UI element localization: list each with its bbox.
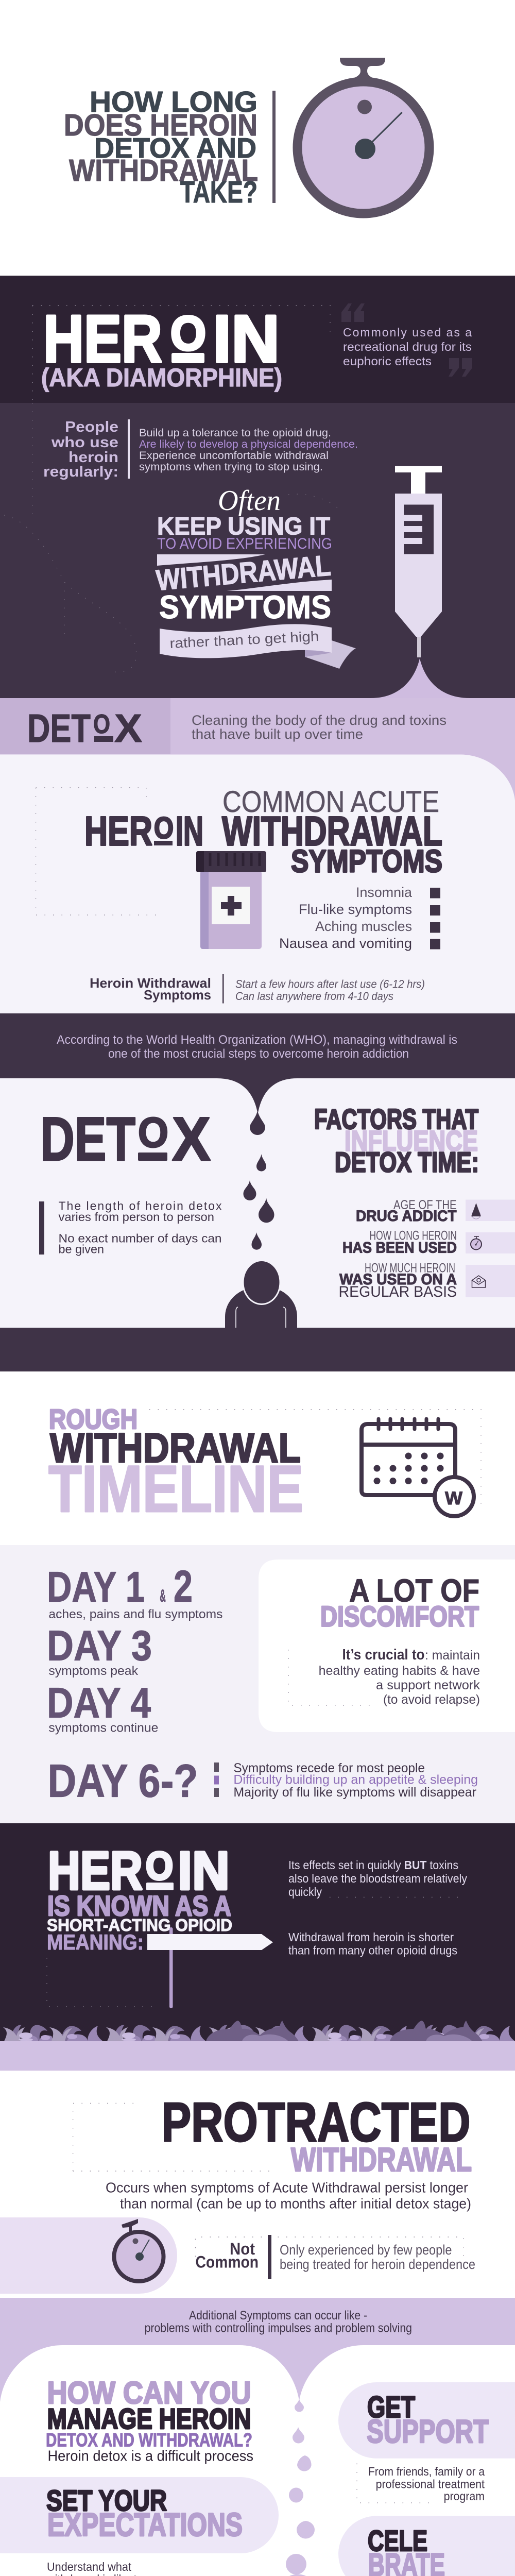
text: detox length varies: No exact number of days can <box>59 1231 221 1245</box>
icon: envelope with money <box>472 1276 485 1287</box>
factor: age of the drug addict: DRUG ADDICT <box>356 1208 456 1225</box>
text: it's crucial to: : maintain <box>425 1648 480 1663</box>
day 4: DAY 4 <box>47 1679 151 1727</box>
panel: short-acting opioid <box>0 1823 515 2041</box>
text: detox meaning <box>192 713 447 742</box>
text: only experienced by few <box>280 2242 475 2272</box>
panel: people who use heroin regularly <box>0 403 515 698</box>
text: detox length varies: be given <box>59 1243 104 1256</box>
text: effects and toxins <box>288 1858 467 1899</box>
heading: withdrawal: WITHDRAWAL <box>291 2141 472 2178</box>
pill: set your expectations <box>0 2477 279 2553</box>
label: heroin withdrawal symptoms <box>90 975 211 1003</box>
text: it's crucial to: (to avoid relapse) <box>383 1692 480 1707</box>
illustration: grass <box>0 2021 515 2041</box>
text: shorter withdrawal: than from many other opioid drugs <box>288 1943 457 1957</box>
heading: how can you manage heroin detox and withdrawal <box>46 2376 252 2450</box>
list: symptoms: Flu-like symptoms <box>299 902 412 917</box>
factor: age of the drug addict: AGE OF THE <box>393 1198 456 1212</box>
heading: meaning: MEANING: <box>47 1930 144 1954</box>
icon: syringe <box>371 466 470 698</box>
icon: pill bottle <box>196 851 266 949</box>
heading: detox <box>27 706 142 751</box>
factor: age of the drug addict <box>356 1198 515 1225</box>
text: from friends family <box>368 2465 485 2503</box>
list: symptoms: Aching muscles <box>315 919 412 934</box>
subheading: aka diamorphine: (AKA DIAMORPHINE) <box>41 363 282 392</box>
text: detox length varies: The length of heroin detox <box>59 1199 222 1213</box>
heading: symptoms: SYMPTOMS <box>291 844 442 879</box>
heading: heroin: O <box>170 306 206 360</box>
panel: timeline days <box>0 1545 515 1823</box>
day 3: symptoms peak <box>48 1664 139 1678</box>
icon: small stopwatch <box>471 1236 482 1250</box>
text: who statement: According to the World Health Organization (WHO), managing withdrawal is <box>57 1033 457 1047</box>
heading: factors that influence detox time: INFLUENCE <box>345 1124 478 1157</box>
heading: people who use heroin regularly: who use <box>51 434 118 451</box>
heading: detox: DET <box>27 706 91 751</box>
list: symptoms <box>279 885 440 951</box>
text: commonly used: recreational drug for its <box>343 340 472 353</box>
text: who statement <box>57 1033 457 1061</box>
heading: heroin: HER <box>43 301 162 376</box>
label: not common <box>196 2240 259 2272</box>
factor: how much heroin was used <box>339 1261 515 1300</box>
pill: stopwatch holder <box>0 2217 177 2294</box>
text: commonly used: Commonly used as a <box>343 326 472 339</box>
icon: party hat <box>471 1203 481 1219</box>
title: how long does heroin detox and withdrawal take <box>64 86 258 209</box>
heading: how can you manage heroin detox and withdrawal: DETOX AND WITHDRAWAL? <box>46 2430 252 2450</box>
factor: how long heroin has been used <box>342 1229 515 1257</box>
day 1 and 2: aches, pains and flu symptoms <box>48 1607 222 1621</box>
day 6 onward: Difficulty building up an appetite & sleeping <box>233 1772 478 1787</box>
heading: detox: O <box>93 709 110 739</box>
text: often: Often <box>218 485 281 517</box>
day 4: symptoms continue <box>48 1721 158 1735</box>
text: effects of regular use: Are likely to develop a physical dependence. <box>139 438 358 450</box>
heading: factors that influence detox time: DETOX TIME: <box>335 1146 479 1178</box>
text: effects of regular use: symptoms when trying to stop using. <box>139 461 323 473</box>
text: understand what withdrawal is like: Understand what <box>47 2560 132 2573</box>
illustration: lilac drops <box>289 2399 315 2539</box>
heading: people who use heroin regularly: heroin <box>68 449 118 466</box>
heading: heroin withdrawal: WITHDRAWAL <box>222 808 442 854</box>
title: how long does heroin detox and withdrawal take: HOW LONG <box>90 86 258 118</box>
day 6 onward: DAY 6-? <box>47 1756 198 1807</box>
heading: detox: O <box>138 1109 168 1156</box>
icon: opening quote <box>341 303 365 322</box>
text: it's crucial to: healthy eating habits & have <box>319 1664 480 1678</box>
heading: heroin: IN <box>213 301 280 376</box>
text: from friends family: professional treatment <box>376 2477 485 2490</box>
heading: heroin: O <box>146 1844 173 1888</box>
day 1 and 2 <box>47 1562 222 1621</box>
text: only experienced by few: being treated for heroin dependence <box>280 2257 475 2272</box>
text: effects and toxins: also leave the bloodstream relatively <box>288 1872 467 1885</box>
text: effects of regular use: Experience uncomfortable withdrawal <box>139 450 329 462</box>
text: shorter withdrawal: Withdrawal from heroin is shorter <box>288 1930 454 1944</box>
label: not common: Common <box>196 2253 259 2272</box>
text: it's crucial to: It’s crucial to <box>342 1647 424 1663</box>
pill: set your expectations: SET YOUR <box>46 2484 167 2517</box>
pill: get support <box>338 2382 515 2459</box>
text: only experienced by few: Only experienced by few people <box>280 2242 452 2258</box>
text: protracted description <box>106 2180 471 2211</box>
heading: a lot of discomfort: A LOT OF <box>349 1573 479 1609</box>
text: additional symptoms <box>145 2309 412 2335</box>
day 6 onward <box>47 1756 478 1807</box>
heading: withdrawal: WITHDRAWAL <box>50 1425 301 1471</box>
heading: heroin withdrawal <box>84 808 442 854</box>
label: not common: Not <box>230 2240 255 2258</box>
icon: signpost arrow <box>147 1927 273 2008</box>
panel: additional symptoms <box>0 2298 515 2416</box>
day 3: DAY 3 <box>47 1622 152 1670</box>
heading: heroin withdrawal: IN <box>176 808 211 854</box>
day 6 onward: Majority of flu like symptoms will disappear <box>233 1785 476 1800</box>
heading: how can you manage heroin detox and withdrawal: MANAGE HEROIN <box>47 2402 251 2435</box>
heading: people who use heroin regularly: regularly: <box>43 464 118 480</box>
text: it's crucial to: a support network <box>376 1678 480 1692</box>
text: onset and duration: Can last anywhere from 4-10 days <box>235 990 393 1003</box>
title: how long does heroin detox and withdrawal take: TAKE? <box>180 175 258 209</box>
icon: calendar: W <box>445 1488 462 1509</box>
label: heroin withdrawal symptoms: Symptoms <box>144 987 211 1003</box>
icon: closing quote <box>449 358 472 377</box>
icon: person <box>225 1260 297 1328</box>
factor: how long heroin has been used: HOW LONG HEROIN <box>370 1229 457 1243</box>
icon: stopwatch <box>293 58 434 218</box>
subheading: to avoid experiencing: TO AVOID EXPERIENCING <box>157 535 332 552</box>
list: symptoms: Nausea and vomiting <box>279 936 412 951</box>
heading: common acute: COMMON ACUTE <box>222 785 439 819</box>
text: onset and duration <box>235 978 425 1003</box>
title: how long does heroin detox and withdrawal take: DOES HEROIN <box>64 108 258 142</box>
banner: rather than to get high <box>160 624 356 669</box>
text: difficult process: Heroin detox is a difficult process <box>47 2448 253 2465</box>
heading: timeline: TIMELINE <box>48 1452 303 1526</box>
text: detox length varies: varies from person to person <box>59 1210 214 1224</box>
text: detox meaning: that have built up over time <box>192 726 363 742</box>
text: shorter withdrawal <box>288 1930 457 1957</box>
panel: heroin definition <box>0 276 515 403</box>
heading: rough: ROUGH <box>49 1404 138 1435</box>
text: who statement: one of the most crucial steps to overcome heroin addiction <box>108 1047 409 1061</box>
panel: how to manage <box>0 2345 515 2576</box>
text: from friends family: program <box>444 2489 485 2503</box>
text: detox meaning: Cleaning the body of the drug and toxins <box>192 713 447 728</box>
text: protracted description: Occurs when symptoms of Acute Withdrawal persist longer <box>106 2180 468 2196</box>
heading: heroin withdrawal: HER <box>84 808 152 854</box>
factor: how much heroin was used: HOW MUCH HEROIN <box>365 1261 455 1276</box>
day 1 and 2: & <box>158 1586 168 1605</box>
label: heroin withdrawal symptoms: Heroin Withdrawal <box>90 975 211 991</box>
banner: rather than to get high: rather than to get high <box>169 629 319 651</box>
heading: a lot of discomfort <box>320 1573 479 1632</box>
pill: celebrate <box>338 2516 515 2576</box>
text: protracted description: than normal (can be up to months after initial detox stage) <box>120 2195 471 2211</box>
panel: detox definition <box>0 698 515 801</box>
heading: detox: X <box>114 706 142 751</box>
heading: heroin: IN <box>178 1841 230 1901</box>
pill: set your expectations: EXPECTATIONS <box>47 2507 243 2543</box>
panel: protracted withdrawal <box>0 2071 515 2298</box>
pill: get support: GET <box>367 2391 415 2424</box>
heading: short-acting opioid: SHORT-ACTING OPIOID <box>47 1916 232 1935</box>
icon: standing person <box>280 2554 316 2576</box>
heading: people who use heroin regularly: People <box>65 419 118 435</box>
heading: heroin: HER <box>48 1841 143 1901</box>
icon: calendar <box>362 1419 474 1516</box>
text: it's crucial to <box>319 1647 480 1707</box>
panel: who statement <box>0 1013 515 1078</box>
text: effects of regular use: Build up a tolerance to the opioid drug. <box>139 427 331 439</box>
text: commonly used <box>343 326 472 368</box>
heading: withdrawal: WITHDRAWAL <box>155 549 332 597</box>
heading: a lot of discomfort: DISCOMFORT <box>320 1600 479 1632</box>
heading: heroin <box>43 301 280 376</box>
text: understand what withdrawal is like <box>46 2560 184 2576</box>
band: dark divider <box>0 1328 515 1371</box>
title: how long does heroin detox and withdrawal take: DETOX AND <box>94 132 256 164</box>
heading: detox: DET <box>40 1105 135 1174</box>
panel: common acute withdrawal symptoms <box>0 754 515 1013</box>
heading: is known as a: IS KNOWN AS A <box>47 1890 231 1922</box>
text: detox length varies <box>59 1199 222 1256</box>
title: how long does heroin detox and withdrawal take: WITHDRAWAL <box>69 154 258 188</box>
list: symptoms: Insomnia <box>356 885 413 900</box>
illustration: dripping drops <box>217 1078 297 1250</box>
heading: people who use heroin regularly <box>43 419 118 480</box>
text: effects and toxins: Its effects set in quickly BUT toxins <box>288 1858 458 1872</box>
card: a lot of discomfort <box>259 1560 515 1732</box>
factor: how much heroin was used: WAS USED ON A <box>339 1271 457 1288</box>
panel: rough withdrawal timeline heading <box>0 1371 515 1545</box>
text: additional symptoms: Additional Symptoms can occur like - <box>189 2309 367 2323</box>
factor: how much heroin was used: REGULAR BASIS <box>339 1283 457 1300</box>
panel: detox and factors <box>0 1078 515 1328</box>
heading: keep using it: KEEP USING IT <box>157 513 330 540</box>
text: effects and toxins: quickly <box>288 1885 322 1899</box>
heading: detox: X <box>172 1105 211 1174</box>
text: effects of regular use <box>139 427 358 473</box>
day 6 onward: Symptoms recede for most people <box>233 1761 425 1775</box>
heading: heroin withdrawal: O <box>154 811 174 845</box>
text: from friends family: From friends, family or a <box>368 2465 485 2478</box>
band: lilac divider <box>0 2041 515 2071</box>
day 1 and 2: 2 <box>174 1562 193 1612</box>
pill: celebrate: CELE <box>368 2524 427 2557</box>
text: additional symptoms: problems with controlling impulses and problem solving <box>145 2321 412 2335</box>
panel: title <box>0 0 515 276</box>
day 1 and 2: DAY 1 <box>47 1563 145 1611</box>
text: onset and duration: Start a few hours after last use (6-12 hrs) <box>235 978 425 991</box>
heading: factors that influence detox time <box>314 1103 479 1178</box>
heading: how can you manage heroin detox and withdrawal: HOW CAN YOU <box>47 2376 251 2410</box>
factor: how long heroin has been used: HAS BEEN USED <box>342 1240 457 1257</box>
text: commonly used: euphoric effects <box>343 354 432 368</box>
icon: stopwatch <box>114 2219 164 2281</box>
heading: symptoms: SYMPTOMS <box>159 589 331 625</box>
heading: heroin <box>48 1841 230 1901</box>
